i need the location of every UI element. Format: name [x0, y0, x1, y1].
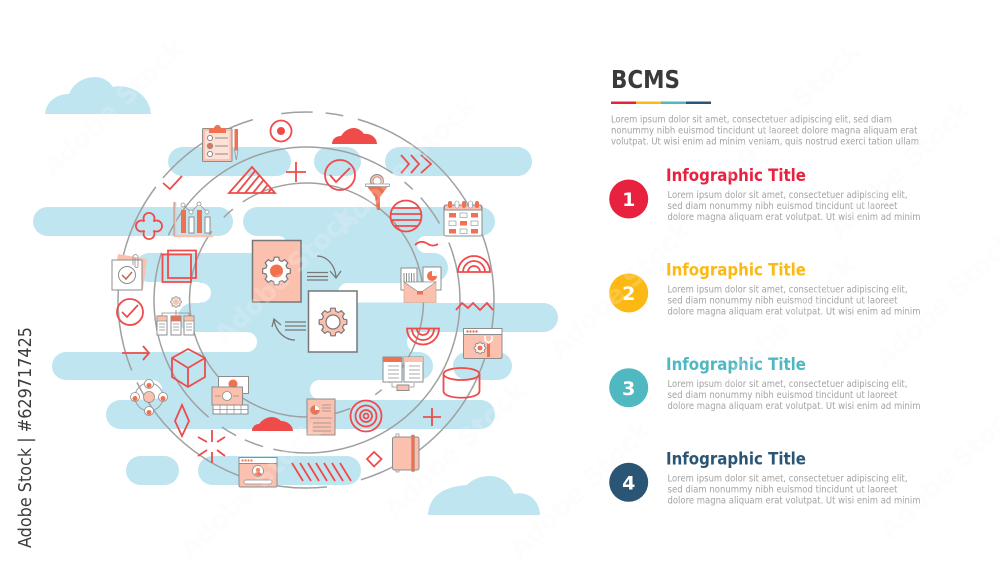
icon: calendar	[444, 201, 482, 236]
item 2 badge	[609, 274, 648, 312]
item 2 number: 2	[622, 283, 635, 305]
watermark: Adobe Stock	[544, 215, 697, 365]
icon: org chart documents	[157, 297, 194, 335]
item 4	[609, 450, 920, 506]
intro paragraph	[611, 115, 919, 148]
icon: clipboard and pen	[202, 125, 238, 162]
icon: money stack	[212, 376, 248, 414]
icon: red cloud bottom	[252, 417, 293, 431]
icon: sticky note check	[112, 254, 147, 290]
item 3 badge	[609, 368, 648, 407]
icon: people network	[130, 380, 168, 416]
item 1 number: 1	[622, 189, 635, 211]
icon: zigzag	[456, 303, 493, 310]
icon: mail with documents	[401, 267, 441, 302]
icon: half rainbow	[458, 256, 490, 272]
item 1 badge	[609, 180, 648, 218]
intro paragraph: nonummy nibh euismod tincidunt ut laoreet dolore magna aliquam erat	[611, 126, 918, 136]
item 3 text: dolore magna aliquam erat volutpat. Ut wisi enim ad minim	[668, 401, 920, 412]
icon: funnel and coin	[366, 174, 390, 210]
icon: cube	[172, 349, 205, 387]
icon: browser profile	[239, 458, 277, 487]
icon: circle check left	[117, 299, 143, 325]
center arrow: doc two to doc one	[272, 319, 306, 340]
icon: overlapping squares	[162, 250, 196, 282]
item 1 text	[668, 190, 920, 223]
item 2 text: Lorem ipsum dolor sit amet, consectetuer adipiscing elit,	[668, 285, 908, 296]
icon: squiggle	[415, 242, 438, 246]
item 4 heading: Infographic Title	[666, 450, 806, 469]
intro paragraph: Lorem ipsum dolor sit amet, consectetuer adipiscing elit, sed diam	[611, 115, 892, 126]
dashed middle ring	[108, 101, 506, 499]
icon: small diamond	[367, 452, 382, 466]
icon: circle check	[325, 160, 355, 190]
watermark: Adobe Stock	[379, 375, 532, 525]
item 4 text	[668, 474, 920, 506]
icon: notebook	[392, 434, 419, 472]
item 3 heading: Infographic Title	[666, 355, 806, 374]
icon: bar chart	[174, 202, 213, 236]
item 4 number: 4	[622, 472, 635, 494]
item 4 text: sed diam nonummy nibh euismod tincidunt ut laoreet	[668, 485, 898, 496]
item 4 badge	[609, 463, 648, 502]
icon: red arrow	[122, 346, 149, 360]
watermark: Adobe Stock	[709, 250, 862, 400]
icon: red diamond	[175, 405, 189, 436]
icon: cylinder	[444, 368, 480, 398]
item 2 text: sed diam nonummy nibh euismod tincidunt ut laoreet	[668, 296, 898, 307]
item 3 text: Lorem ipsum dolor sit amet, consectetuer adipiscing elit,	[668, 379, 908, 390]
icon: plus top	[286, 162, 306, 182]
watermark: Adobe Stock	[37, 33, 190, 183]
icon: linked document pair	[383, 357, 423, 390]
watermark: Adobe Stock	[714, 35, 867, 185]
icon: clover	[136, 213, 162, 239]
icon: diagonal hatch	[292, 463, 351, 481]
item 2	[609, 260, 920, 318]
item 4 text: dolore magna aliquam erat volutpat. Ut wisi enim ad minim	[668, 496, 920, 506]
watermark: Adobe Stock	[209, 200, 362, 350]
background: blue cloud bars	[33, 77, 567, 515]
icon: browser with tools	[464, 328, 502, 358]
item 3	[609, 355, 920, 412]
dashed inner ring	[145, 138, 468, 462]
item 2 text: dolore magna aliquam erat volutpat. Ut wisi enim ad minim	[668, 306, 920, 318]
icon: red target dot	[270, 120, 292, 142]
icon: chevrons	[401, 155, 431, 173]
item 1 heading: Infographic Title	[666, 166, 806, 185]
watermark: Adobe Stock	[504, 415, 657, 563]
watermark: Adobe Stock	[824, 95, 977, 245]
item 1 text: dolore magna aliquam erat volutpat. Ut wisi enim ad minim	[668, 212, 920, 223]
icon: plus bottom	[423, 408, 441, 426]
icon: half circles down	[407, 328, 439, 344]
side credit: Adobe Stock | #629717425	[16, 327, 36, 548]
intro paragraph: volutpat. Ut wisi enim ad minim veniam, quis nostrud exerci tation ullam	[611, 136, 919, 148]
item 2 heading: Infographic Title	[666, 260, 806, 280]
item 2 text	[668, 285, 920, 318]
center arrow: doc one to doc two	[307, 256, 341, 280]
item 1	[609, 166, 920, 223]
icon: burst	[198, 430, 225, 463]
title colour bar	[611, 102, 711, 104]
item 3 number: 3	[622, 378, 635, 400]
dashed outer ring	[73, 67, 539, 533]
watermark: Adobe Stock	[174, 415, 327, 563]
item 4 text: Lorem ipsum dolor sit amet, consectetuer adipiscing elit,	[668, 474, 908, 485]
center document with gear, white	[308, 291, 357, 352]
icon: red concentric target	[350, 400, 382, 432]
watermark: Adobe Stock	[329, 90, 482, 240]
icon: red cloud top	[332, 128, 377, 144]
icon: report document	[307, 399, 335, 435]
title: BCMS	[611, 65, 680, 94]
item 3 text	[668, 379, 920, 412]
item 1 text: sed diam nonummy nibh euismod tincidunt ut laoreet	[668, 201, 898, 212]
icon: striped circle	[390, 200, 422, 232]
center document with gear, salmon	[252, 240, 301, 302]
item 3 text: sed diam nonummy nibh euismod tincidunt ut laoreet	[668, 390, 898, 401]
icon: hatched triangle	[229, 167, 275, 193]
item 1 text: Lorem ipsum dolor sit amet, consectetuer adipiscing elit,	[668, 190, 908, 201]
icon: small check	[163, 176, 182, 189]
